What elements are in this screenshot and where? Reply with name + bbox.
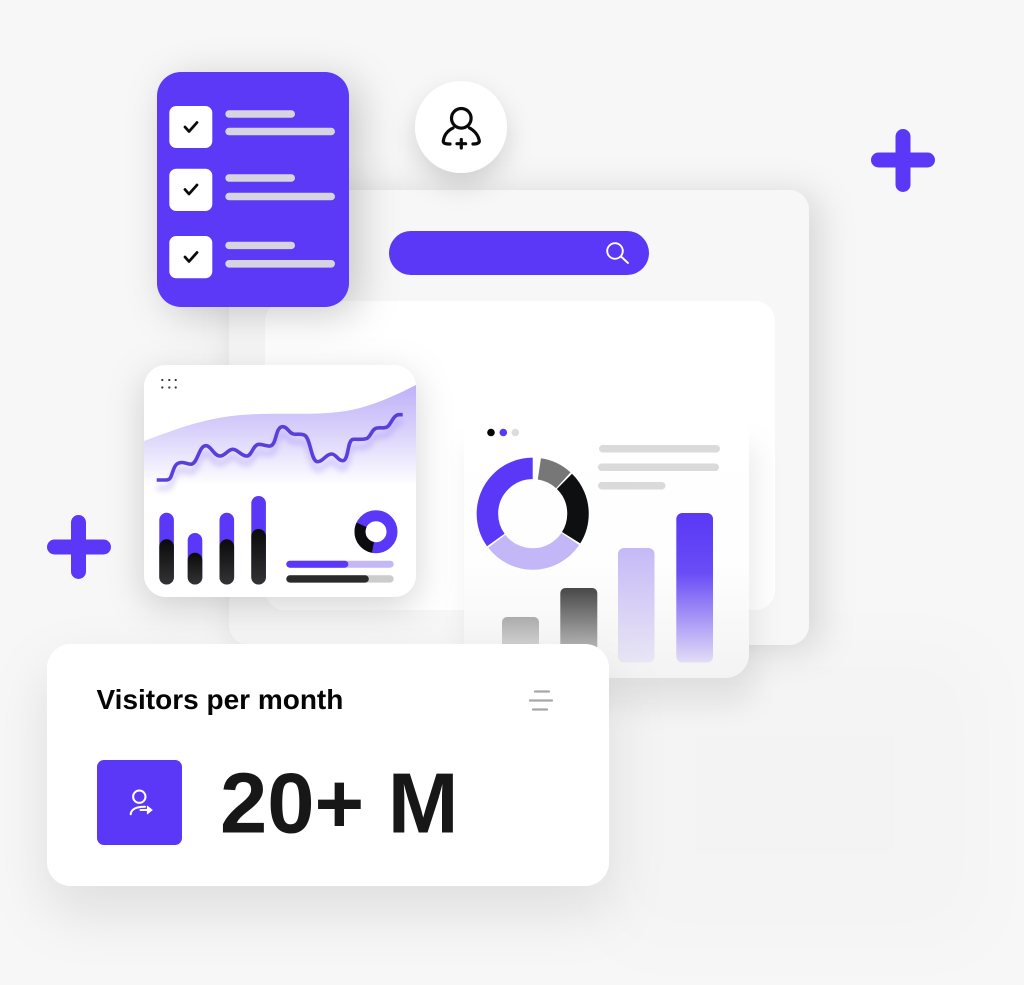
icon: visitor tile: [97, 760, 182, 845]
panel: analytics widget: [144, 365, 416, 597]
donut chart: [487, 468, 578, 559]
panel: donut and bar card: [464, 420, 749, 678]
bar chart: [502, 513, 713, 662]
icon: magnifier: [607, 243, 628, 263]
bars: stacked pills: [159, 496, 266, 584]
icon: menu dots: [161, 379, 177, 389]
icon: add user badge: [415, 81, 507, 173]
small donut: [360, 516, 392, 548]
search bar: [389, 231, 649, 275]
checklist row 1: [169, 106, 335, 148]
progress bars: [286, 561, 394, 583]
icon: filter lines: [530, 692, 552, 710]
line chart: [157, 415, 403, 480]
checklist row 3: [169, 236, 335, 278]
big number: 20+ M: [220, 756, 459, 852]
panel: inner content area: [265, 301, 775, 610]
panel: checklist: [157, 72, 349, 307]
legend dots: [487, 429, 519, 436]
background soft shadow: [600, 640, 990, 950]
panel: browser window: [229, 190, 809, 645]
area chart: [144, 385, 416, 486]
text placeholder lines: [598, 445, 720, 490]
icon: plus top right: [871, 129, 935, 192]
icon: plus left: [47, 515, 111, 579]
heading: Visitors per month: [96, 684, 343, 715]
checklist row 2: [169, 169, 335, 211]
line shadow: [157, 423, 403, 488]
panel: visitors per month: [47, 644, 609, 886]
